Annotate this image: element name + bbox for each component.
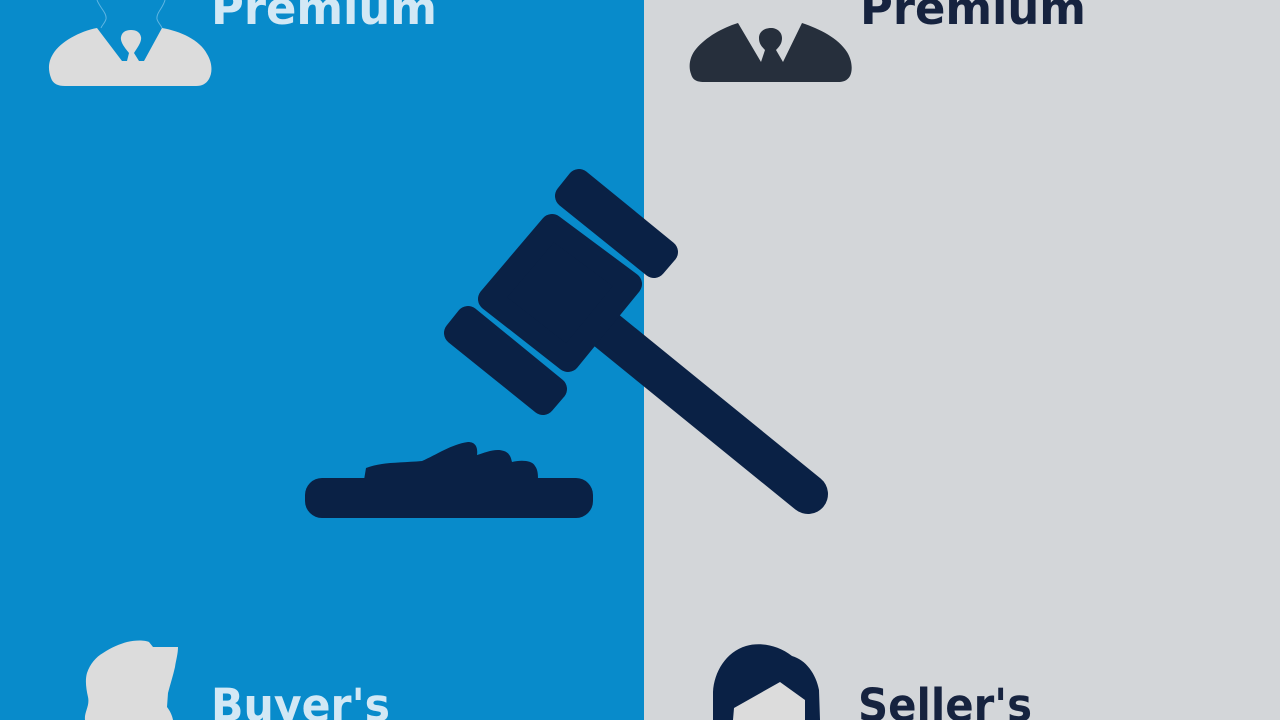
gavel top cap <box>567 181 666 266</box>
icon: buyer premium person in suit <box>49 0 211 86</box>
icon: seller premium person in suit <box>690 23 852 82</box>
panel: buyer side background <box>0 0 644 720</box>
gavel handle <box>600 325 808 494</box>
panel: seller side background <box>644 0 1280 720</box>
icon: buyer person head <box>85 640 178 720</box>
icon: gavel <box>456 181 808 494</box>
gavel bottom cap <box>456 318 555 403</box>
icon: seller person head <box>713 644 820 720</box>
icon: gavel sound block <box>305 442 593 518</box>
gavel head <box>490 226 630 360</box>
